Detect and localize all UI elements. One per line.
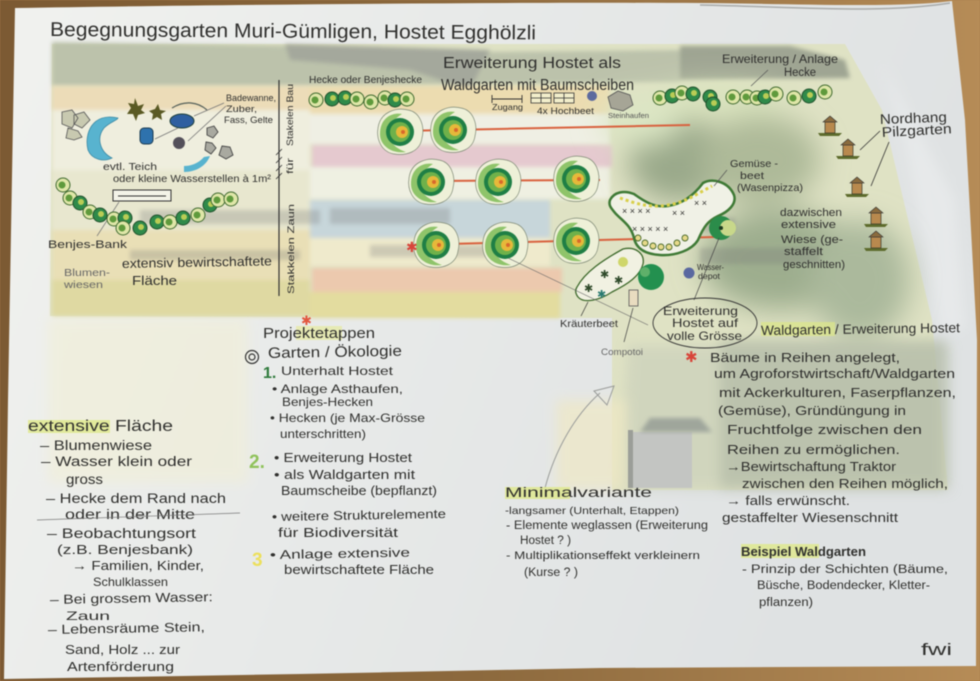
body: → falls erwünscht.: [726, 494, 850, 508]
heading: Waldgarten / Erweiterung Hostet: [761, 320, 960, 338]
list: Sand, Holz ... zur: [65, 642, 181, 657]
list: Zaun: [66, 609, 110, 623]
label: extensiv bewirtschaftete Fläche: extensiv bewirtschaftete: [122, 253, 272, 271]
barrel: [140, 128, 153, 144]
list: [505, 505, 708, 579]
body: (Gemüse), Gründüngung in: [718, 404, 906, 418]
green bush: [638, 264, 664, 290]
icon: Wasserdepot: [684, 263, 724, 281]
heading: Erweiterung Hostet als Waldgarten: Erweiterung Hostet als: [443, 55, 621, 72]
dark plants: [127, 98, 166, 121]
label: extensiv bewirtschaftete Fläche: Fläche: [132, 273, 177, 288]
signature: fwi: [921, 640, 952, 659]
list: – Hecke dem Rand nach: [46, 491, 226, 506]
callout: Erweiterung Hostet auf volle Grösse: [653, 238, 757, 348]
label: Erweiterung / Anlage Hecke: Hecke: [784, 67, 816, 79]
stage 3: 3: [252, 550, 263, 571]
field strips: [52, 86, 612, 318]
stage 3: [252, 546, 434, 577]
highlight: [741, 544, 819, 558]
label: Kräuterbeet: Kräuterbeet: [560, 319, 618, 330]
boulders right: [205, 126, 233, 159]
label: [224, 93, 276, 125]
panel: Gemüsebeet: × × × × ×: [632, 224, 668, 234]
list: Artenförderung: [67, 659, 174, 674]
list: gross: [66, 472, 103, 487]
heading: Projektetappen: [263, 325, 375, 342]
panel: Nordhang mushroom garden: [818, 109, 952, 251]
list: – Bei grossem Wasser:: [50, 589, 213, 607]
label: Gemüsebeet: (Wasenpizza): [737, 182, 803, 194]
list: pflanzen): [759, 597, 813, 609]
label: Zuber,: [226, 104, 257, 114]
label: extensiv bewirtschaftete Fläche: [122, 253, 272, 288]
heading: Erweiterung Hostet als Waldgarten: [441, 55, 634, 94]
label: Erweiterung / Anlage Hecke: [722, 52, 838, 86]
label: Erweiterung / Anlage Hecke: Erweiterung / Anlage: [722, 52, 838, 66]
list: – Wasser klein oder: [41, 454, 193, 469]
fence line with labels: für: [285, 158, 296, 174]
list: → Familien, Kinder,: [72, 558, 204, 573]
stage 1: Unterhalt Hostet: [281, 364, 394, 378]
label: Compotoi: Compotoi: [601, 347, 643, 358]
icon: red star: ✱: [685, 349, 698, 366]
panel: Gemüsebeet: × ×: [672, 208, 685, 218]
panel: top hedge right: [653, 85, 832, 111]
lower photo part: [556, 340, 950, 490]
panel: curved hedge: [56, 178, 238, 235]
highlight: [296, 326, 342, 340]
highlight: [505, 487, 570, 499]
callout: Erweiterung Hostet auf volle Grösse: Hostet auf: [672, 316, 739, 330]
panel: tree rows with red lines: [378, 107, 715, 267]
heading: Beispiel Waldgarten: [741, 544, 866, 559]
fence line with labels: Stakelen Bau: [285, 84, 296, 146]
boulders left: [62, 110, 90, 140]
icon: Wasserdepot: depot: [698, 272, 721, 281]
fence line with labels: Stakkelen Zaun: [286, 204, 297, 294]
list: Büsche, Bodendecker, Kletter-: [757, 580, 930, 592]
stage 2: Baumscheibe (bepflanzt): [281, 484, 437, 498]
list: (z.B. Benjesbank): [57, 542, 193, 557]
icon: Wasserdepot: Wasser-: [697, 263, 724, 272]
tree at Gemüsebeet: [709, 216, 736, 240]
text: pond note: [103, 162, 272, 185]
icon: 4x Hochbeet: [531, 93, 595, 116]
label: Blumenwiesen: wiesen: [63, 280, 103, 291]
callout: Erweiterung Hostet auf volle Grösse: volle Grösse: [667, 329, 742, 343]
tree row 1: [378, 107, 476, 154]
list: [40, 438, 226, 674]
body: Fruchtfolge zwischen den: [727, 423, 922, 437]
list: -langsamer (Unterhalt, Etappen): [505, 505, 679, 517]
list: – Blumenwiese: [40, 438, 152, 453]
panel: pond area with water elements: [62, 93, 276, 172]
label: Gemüsebeet: Gemüse -: [730, 158, 779, 170]
panel: Kräuterbeet: ✱: [600, 269, 609, 281]
icon: Steinhaufen: [608, 91, 649, 120]
icon: red star: ✱: [301, 313, 312, 328]
lower pond crescent: [184, 156, 210, 172]
label: Badewanne,: [226, 93, 276, 103]
panel: Nordhang mushroom garden: Nordhang: [880, 109, 947, 127]
tub dark: [173, 137, 185, 149]
stage 2: • weitere Strukturelemente: [272, 507, 446, 524]
panel: Kräuterbeet: ✱: [614, 275, 623, 287]
label: dazwischen extensive Wiese: [780, 207, 845, 271]
label: Fass, Gelte: [224, 115, 273, 125]
label: Kräuterbeet: [508, 258, 648, 330]
label: Compotoi: [601, 308, 643, 358]
body: Reihen zu ermöglichen.: [727, 443, 900, 457]
arrow: pencil arrow to Hostet: [545, 386, 614, 488]
stage 2: für Biodiversität: [278, 526, 399, 540]
heading: Erweiterung Hostet als Waldgarten: Waldgarten mit Baumscheiben: [441, 77, 634, 94]
panel: Nordhang mushroom garden: Pilzgarten: [881, 120, 952, 140]
panel: extensive Fläche: [28, 418, 226, 674]
title: Begegnungsgarten Muri-Gümligen, Hostet Egghölzli: [50, 19, 536, 44]
icon: Steinhaufen: Steinhaufen: [608, 111, 649, 120]
icon: red star: ✱: [406, 239, 418, 255]
panel: Kräuterbeet: ✱: [597, 289, 606, 301]
panel: Gemüsebeet: [609, 181, 735, 255]
list: - Multiplikationseffekt verkleinern: [506, 550, 700, 562]
fence line with labels: [276, 80, 297, 296]
heading: extensive Fläche: [28, 418, 173, 435]
list: Hostet ? ): [520, 535, 571, 547]
stage 1: unterschritten): [280, 427, 366, 441]
list: - Prinzip der Schichten (Bäume,: [742, 564, 948, 576]
icon: Zugang gate: Zugang: [492, 102, 523, 112]
stage 2: • als Waldgarten mit: [274, 468, 416, 482]
text: pond note: oder kleine Wasserstellen à 1m²: [113, 174, 272, 185]
label: Blumenwiesen: Blumen-: [64, 268, 110, 279]
gray green top band: [52, 42, 850, 90]
list: – Beobachtungsort: [47, 526, 196, 541]
subheading: Garten / Ökologie: [268, 342, 402, 362]
label: dazwischen extensive Wiese: extensive: [781, 219, 836, 231]
label: Gemüsebeet: [714, 158, 803, 194]
icon: 4x Hochbeet: 4x Hochbeet: [537, 106, 595, 116]
icon: spiral: [246, 350, 258, 364]
icon: Kompost: [629, 290, 638, 306]
ghost writing from reverse side: [130, 208, 820, 264]
label: dazwischen extensive Wiese: Wiese (ge-: [781, 234, 843, 246]
map base: [50, 44, 948, 490]
tree row 3: [414, 218, 599, 267]
panel: Gemüsebeet: × × × ×: [622, 206, 651, 216]
stage 2: [249, 451, 446, 540]
panel: Kräuterbeet: ✱: [584, 283, 593, 295]
panel: Waldgarten text block: [685, 320, 960, 525]
stage 3: • Anlage extensive: [270, 546, 410, 562]
list: – Lebensräume Stein,: [48, 619, 205, 637]
panel: Minimalvariante: [505, 484, 708, 579]
body: Bäume in Reihen angelegt,: [710, 351, 900, 365]
list: (Kurse ? ): [524, 567, 578, 579]
panel: Gemüsebeet: × ×: [694, 198, 707, 208]
panel: top hedge left: [309, 91, 414, 109]
callout: Erweiterung Hostet auf volle Grösse: Erweiterung: [663, 304, 738, 318]
label: Hecke oder Benjeshecke: Hecke oder Benjeshecke: [309, 74, 422, 86]
green garden blotches: [600, 86, 910, 340]
panel: Beispiel Waldgarten: [741, 544, 948, 609]
label: dazwischen extensive Wiese: staffelt: [784, 246, 823, 258]
faint lower-left wash: [48, 318, 248, 483]
list: [742, 564, 948, 609]
pond crescent: [87, 117, 118, 160]
body: gestaffelter Wiesenschnitt: [722, 511, 899, 525]
tub: [170, 114, 194, 128]
upper pond edge: [172, 103, 207, 110]
stage 1: Benjes-Hecken: [282, 395, 373, 409]
body: um Agroforstwirtschaft/Waldgarten: [714, 367, 955, 381]
label: dazwischen extensive Wiese: dazwischen: [780, 207, 842, 219]
label: Blumenwiesen: [63, 268, 110, 291]
stage 1: [263, 364, 425, 441]
icon: Zugang gate: [492, 95, 523, 112]
stage 3: bewirtschaftete Fläche: [284, 563, 434, 577]
body: mit Ackerkulturen, Faserpflanzen,: [719, 386, 956, 400]
panel: Projektetappen: [246, 313, 446, 577]
body: [710, 351, 956, 525]
label: Gemüsebeet: beet: [740, 170, 764, 182]
pointer lines: [155, 103, 226, 141]
body: zwischen den Reihen möglich,: [742, 477, 948, 491]
stage 2: • Erweiterung Hostet: [274, 451, 413, 465]
text: pond note: evtl. Teich: [103, 162, 157, 173]
label: dazwischen extensive Wiese: geschnitten): [783, 259, 845, 271]
list: Schulklassen: [93, 575, 168, 589]
highlight: [28, 420, 110, 433]
faded aerial photo under the plan: [48, 42, 950, 490]
stage 1: 1.: [263, 365, 276, 382]
body: →Bewirtschaftung Traktor: [726, 460, 896, 474]
panel: Kräuterbeet: [576, 248, 643, 301]
icon: bench: [97, 190, 171, 236]
heading: Minimalvariante: [505, 484, 652, 500]
list: - Elemente weglassen (Erweiterung: [506, 520, 708, 532]
stage 1: • Anlage Asthaufen,: [272, 382, 403, 396]
label: Benjes-Bank: Benjes-Bank: [48, 239, 128, 251]
stage 2: 2.: [249, 452, 265, 473]
tree row 2: [409, 156, 599, 204]
icon: water dot: [587, 91, 597, 101]
list: oder in der Mitte: [65, 507, 195, 522]
stage 1: • Hecken (je Max-Grösse: [270, 411, 425, 425]
highlight: [761, 322, 835, 336]
